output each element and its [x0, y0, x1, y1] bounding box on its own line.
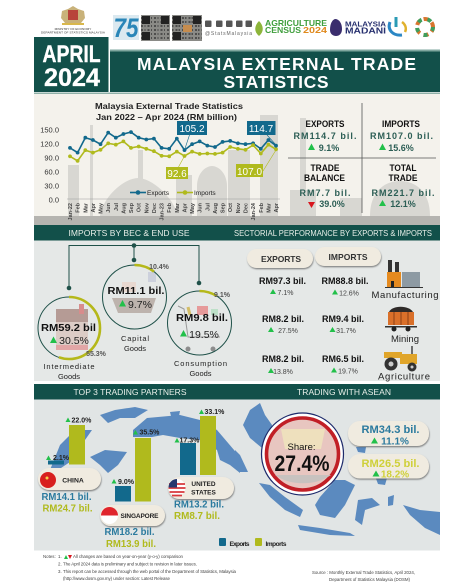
donut: intermediate goods: Goods: [58, 372, 80, 381]
donut: consumption goods: Goods: [189, 369, 212, 378]
callout: April 2024 imports: 107.0: [237, 167, 262, 178]
line chart: 120.0: [40, 140, 59, 148]
share badge: 27.4%: [274, 451, 330, 476]
mining label: Mining: [391, 334, 419, 345]
mining values: 27.5%: [278, 328, 298, 335]
manufacturing values: [259, 276, 368, 298]
exports line: [70, 132, 276, 153]
KPI: total trade: 12.1%: [390, 199, 416, 209]
line chart: May: [190, 202, 196, 214]
KPI dividers: [288, 103, 436, 213]
panel: date badge: [34, 37, 108, 92]
panel: imports and sectoral background: [34, 225, 440, 381]
line chart: Aug: [121, 203, 127, 214]
icon: agriculture census logo: [255, 18, 327, 36]
KPI: imports: [370, 119, 433, 153]
notes: [43, 554, 237, 581]
pill: China: [38, 468, 101, 490]
line chart: 0.0: [49, 196, 59, 204]
line chart: Feb: [167, 202, 173, 213]
legend: Imports: [266, 541, 287, 548]
icon: Malaysia Madani logo: MADANI: [345, 26, 386, 36]
donut: consumption goods: 19.5%: [189, 329, 219, 341]
United States values: RM13.2 bil.: [174, 500, 224, 510]
KPI: trade balance: BALANCE: [304, 173, 345, 184]
map: ASEAN: [235, 403, 440, 536]
legend: [219, 538, 287, 548]
Singapore values: RM18.2 bil.: [104, 527, 155, 538]
line chart: Feb: [259, 202, 265, 213]
exports pill: [247, 249, 313, 268]
callout: April 2024 exports: 114.7: [249, 124, 274, 135]
donut: consumption goods: 9.1%: [214, 292, 231, 299]
icon: factory: [385, 260, 423, 288]
donut: intermediate goods: [38, 297, 107, 381]
notes: (http://www.dosm.gov.my) under section: Latest Release: [63, 576, 171, 581]
line chart: 30.0: [44, 182, 59, 190]
donut: capital goods: Capital: [121, 334, 149, 343]
line chart: Mar: [175, 202, 181, 213]
line chart: Sep: [129, 202, 135, 213]
line chart: Oct: [228, 203, 234, 212]
manufacturing values: 7.1%: [278, 290, 293, 297]
line chart: Sep: [221, 202, 227, 213]
agriculture values: RM8.2 bil.: [262, 354, 304, 364]
notes: 2.: [58, 562, 62, 566]
donut: consumption goods: [168, 291, 232, 378]
icon: agriculture census logo: 2024: [303, 25, 327, 35]
icon: SDG wheel: [417, 19, 433, 35]
donut: consumption goods: Consumption: [174, 359, 227, 368]
donut: capital goods: 9.7%: [128, 299, 152, 311]
line chart: 90.0: [44, 154, 59, 162]
legend: Exports: [230, 541, 250, 548]
bar chart: Singapore: 9.0%: [118, 479, 135, 486]
manufacturing values: 12.6%: [339, 290, 359, 298]
bar chart: China: 2.1%: [53, 455, 70, 462]
manufacturing label: Manufacturing: [372, 290, 438, 301]
chart legend: [130, 190, 216, 197]
KPI: exports: RM114.7 bil.: [294, 131, 356, 141]
source: Source : Monthly External Trade Statistics, April 2024,: [312, 570, 415, 575]
line chart: Jun: [106, 202, 112, 213]
heading: section bar: IMPORTS BY BEC & END USE: [68, 228, 190, 238]
donut: intermediate goods: 30.5%: [59, 335, 89, 347]
donut: intermediate goods: 55.3%: [86, 351, 107, 358]
agriculture label: Agriculture: [378, 372, 430, 382]
line chart: Mar: [266, 202, 272, 213]
line chart: 60.0: [44, 168, 59, 176]
donut: capital goods: Goods: [124, 344, 146, 353]
line chart: Oct: [137, 203, 143, 212]
mining values: RM9.4 bil.: [322, 314, 364, 324]
callout: April 2024 imports: [236, 150, 276, 178]
title: MALAYSIA EXTERNAL TRADE: [137, 54, 416, 74]
heading: section bar: [34, 225, 440, 240]
China values: [42, 492, 93, 514]
donut: capital goods: 10.4%: [149, 264, 170, 271]
KPI: trade balance: [300, 163, 350, 209]
share badge: Share:: [288, 442, 316, 453]
panel: sectoral performance: [247, 247, 438, 382]
line chart: May: [98, 202, 104, 214]
ASEAN imports pill: RM26.5 bil.: [362, 458, 420, 470]
heading: section bar: SECTORIAL PERFORMANCE BY EXPORTS & IMPORTS: [234, 228, 432, 238]
line chart: Dec: [244, 203, 250, 213]
line chart: Jan-24: [251, 202, 257, 220]
date year: 2024: [44, 64, 100, 92]
line chart: Nov: [236, 202, 242, 213]
line chart: Aug: [213, 203, 219, 214]
agriculture values: 13.8%: [273, 369, 293, 376]
panel: top trading partners: [38, 409, 287, 550]
imports pill: IMPORTS: [328, 252, 368, 262]
social handle: @StatsMalaysia: [205, 31, 252, 37]
KPI: imports: 15.6%: [388, 143, 414, 153]
pill: United States: UNITED: [191, 481, 216, 488]
icon: national crest: [61, 6, 85, 25]
ASEAN exports pill: [348, 421, 429, 448]
title: [137, 54, 416, 92]
icon: Malaysia Madani logo: MALAYSIA: [345, 20, 387, 28]
bar chart: United States: 33.1%: [204, 409, 225, 416]
icon: swirl logo: [389, 17, 406, 35]
line chart: Nov: [144, 202, 150, 213]
Singapore values: [104, 527, 156, 550]
imports line: [70, 141, 276, 161]
KPI: exports: EXPORTS: [306, 119, 344, 130]
icon: buildings: [56, 304, 88, 350]
icon: shopping cart: [178, 306, 220, 352]
ministry name: MINISTRY OF ECONOMY: [55, 27, 91, 31]
China values: RM14.1 bil.: [42, 492, 92, 503]
notes: 3.: [58, 569, 62, 574]
line chart: Jan-23: [160, 203, 166, 220]
mining values: [262, 314, 364, 335]
mining values: RM8.2 bil.: [262, 314, 304, 324]
ASEAN imports pill: [348, 454, 429, 480]
pill: United States: STATES: [191, 490, 216, 496]
icon: QR code one: [141, 15, 170, 41]
KPI: trade balance: TRADE: [310, 163, 340, 174]
line chart: Apr: [91, 202, 97, 212]
KPI: total trade: [372, 163, 434, 209]
bar chart: United States: [174, 409, 225, 475]
bar chart: United States: 17.3%: [180, 438, 200, 444]
icon: 75 years logo: 75: [114, 13, 139, 43]
line chart: Jul: [205, 203, 211, 211]
notes: This report can be accessed through the web portal of the Department of Statistics, Malaysia: [63, 569, 237, 574]
line chart: Mar: [83, 202, 89, 213]
line chart: 150.0: [40, 126, 59, 134]
header logos: [41, 6, 433, 43]
bar chart: China: [46, 418, 92, 464]
callout: April 2023 imports: 92.6: [167, 169, 187, 180]
KPI: exports: 9.1%: [319, 143, 339, 153]
ministry name: [41, 27, 106, 35]
notes: Notes:: [43, 554, 56, 559]
KPI: total trade: RM221.7 bil.: [372, 188, 434, 198]
source: Department of Statistics Malaysia (DOSM): [329, 577, 411, 582]
icon: agriculture census logo: CENSUS: [265, 25, 301, 35]
pill: Singapore: [100, 505, 165, 526]
bar chart: China: 22.0%: [72, 418, 92, 424]
agriculture values: RM6.5 bil.: [322, 354, 364, 364]
bar chart title: Malaysia External Trade Statistics: [95, 101, 243, 111]
callout: April 2023 exports: [177, 121, 207, 150]
source: [312, 570, 415, 582]
connector lines: [67, 243, 201, 290]
exports pill: EXPORTS: [261, 254, 301, 264]
KPI: trade balance: RM7.7 bil.: [300, 188, 350, 198]
ASEAN imports pill: 18.2%: [381, 470, 409, 480]
KPI: imports: IMPORTS: [382, 119, 420, 130]
line chart: Apr: [182, 202, 188, 212]
ASEAN exports pill: 11.1%: [381, 436, 409, 448]
icon: social media: [205, 20, 252, 27]
KPI: total trade: TRADE: [388, 173, 418, 184]
heading: section bar two: TOP 3 TRADING PARTNERS: [74, 387, 187, 397]
KPI: imports: RM107.0 bil.: [370, 131, 433, 141]
chart legend: Exports: [147, 190, 170, 197]
manufacturing values: RM88.8 bil.: [322, 276, 368, 286]
agriculture values: [262, 354, 364, 376]
mining values: 31.7%: [336, 328, 356, 335]
ASEAN exports pill: RM34.3 bil.: [362, 424, 420, 436]
KPI: trade balance: 39.0%: [319, 199, 345, 209]
agriculture values: 19.7%: [338, 368, 358, 376]
heading: section bar two: [34, 384, 440, 400]
line chart: Apr: [274, 202, 280, 212]
pill: Singapore: SINGAPORE: [120, 513, 159, 520]
donut: intermediate goods: RM59.2 bil: [41, 322, 96, 334]
notes: All changes are based on year-on-year (y-o-y) comparison: [73, 554, 184, 559]
donut: capital goods: [102, 264, 170, 353]
title: STATISTICS: [224, 72, 328, 92]
icon: cargo ship: [112, 272, 156, 313]
bar chart: Singapore: 35.5%: [140, 430, 160, 436]
line chart: Feb: [76, 202, 82, 213]
callout: April 2023 exports: 105.2: [179, 124, 205, 135]
icon: tractor: [384, 346, 417, 372]
pill: China: CHINA: [62, 478, 84, 484]
icon: agriculture census logo: AGRICULTURE: [265, 18, 327, 28]
line chart: Jun: [198, 202, 204, 213]
KPI: exports: [294, 119, 356, 153]
heading: section bar two: TRADING WITH ASEAN: [297, 387, 391, 397]
callout: April 2023 imports: [166, 156, 188, 180]
Singapore values: RM13.9 bil.: [106, 539, 156, 550]
donut: capital goods: RM11.1 bil.: [108, 285, 165, 297]
icon: mining cart: [385, 307, 417, 332]
share badge: [262, 413, 344, 495]
panel: lower background: [34, 400, 440, 550]
manufacturing values: RM97.3 bil.: [259, 276, 306, 286]
panel: trading with ASEAN: [262, 413, 429, 495]
date month: APRIL: [42, 41, 100, 68]
bar chart: Singapore: [112, 430, 160, 502]
panel: imports by BEC: [38, 243, 232, 381]
panel: trade overview: [34, 92, 440, 225]
imports pill: [315, 247, 381, 266]
line chart: Jan-22: [68, 203, 74, 220]
KPI: total trade: TOTAL: [390, 163, 417, 174]
notes: 1.: [58, 554, 62, 559]
icon: QR code two: [172, 15, 202, 41]
chart legend: Imports: [194, 190, 216, 197]
icon: Malaysia Madani logo: [330, 19, 387, 36]
donut: consumption goods: RM9.8 bil.: [176, 312, 228, 324]
line chart: Jul: [114, 203, 120, 211]
pill: United States: [168, 477, 234, 499]
callout: April 2024 exports: [247, 121, 276, 145]
line chart: Dec: [152, 203, 158, 213]
panel: title: [110, 50, 440, 92]
notes: The April 2024 data is preliminary and subject to revision in later issues.: [63, 562, 197, 566]
map: world: [50, 407, 240, 473]
line chart: [40, 121, 280, 220]
China values: RM24.7 bil.: [42, 504, 93, 514]
donut: intermediate goods: Intermediate: [44, 362, 94, 371]
bar chart title: [95, 101, 243, 122]
bar chart title: Jan 2022 – Apr 2024 (RM billion): [96, 112, 237, 122]
ministry name: DEPARTMENT OF STATISTICS MALAYSIA: [41, 31, 106, 35]
United States values: RM8.7 bil.: [174, 511, 220, 522]
United States values: [174, 500, 224, 522]
city skyline: [34, 115, 440, 225]
